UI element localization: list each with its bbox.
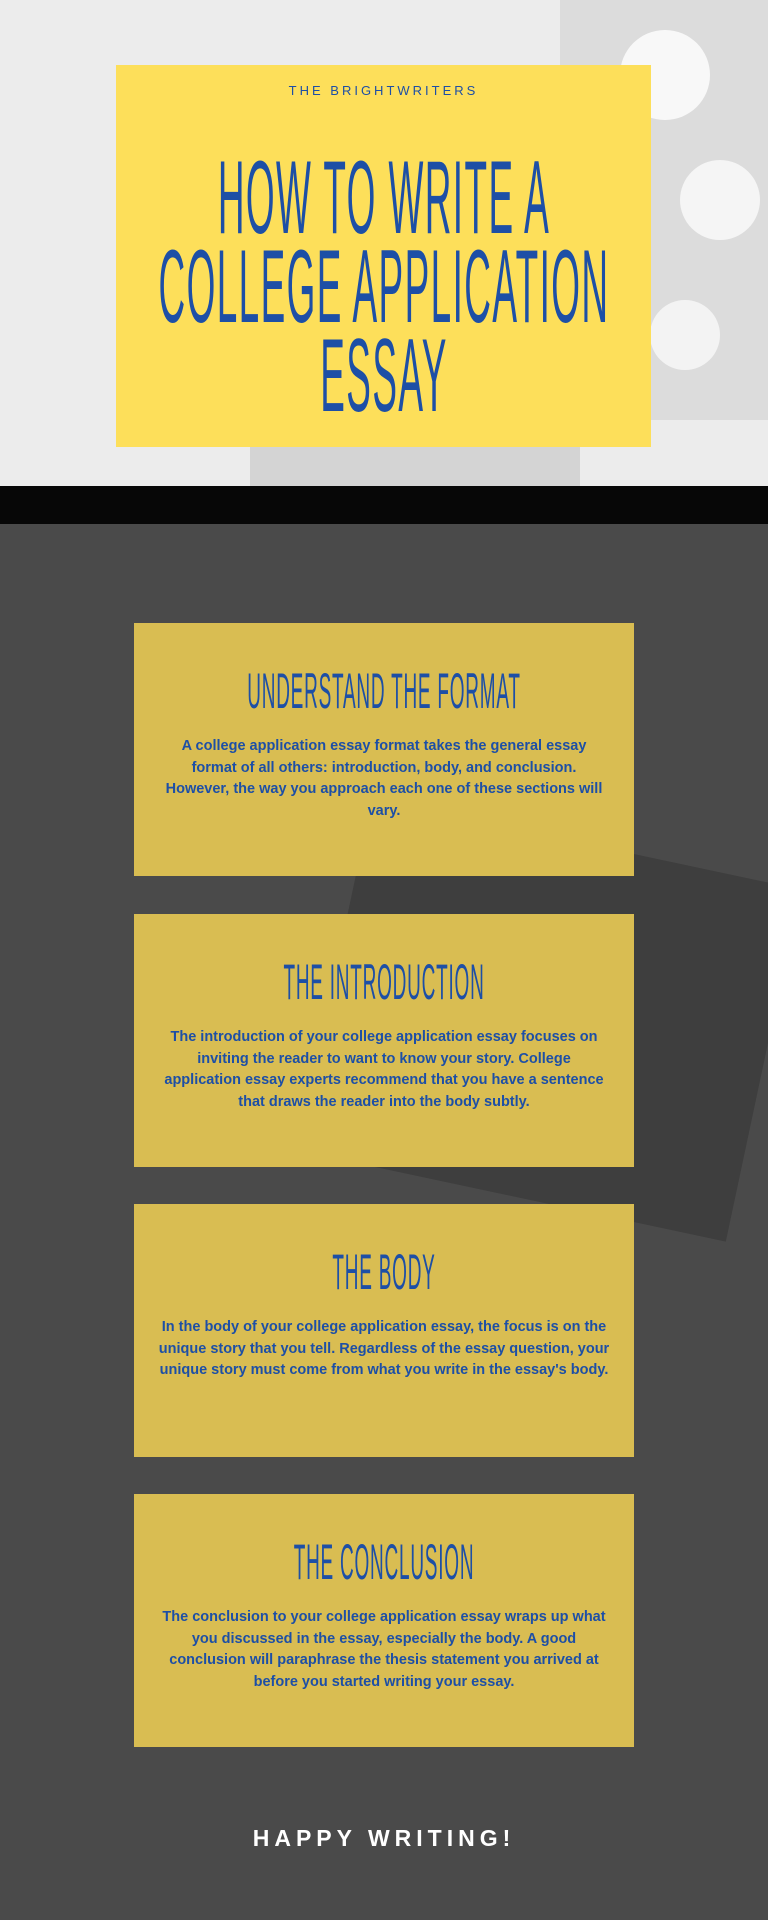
footer text: HAPPY WRITING! [253, 1825, 515, 1851]
title [158, 140, 609, 434]
panel: the conclusion: THE CONCLUSION [294, 1534, 474, 1590]
title: ESSAY [320, 318, 447, 434]
brand name: THE BRIGHTWRITERS [289, 83, 478, 98]
panel: the body [134, 1204, 634, 1457]
panel: understand the format: UNDERSTAND THE FORMAT [247, 663, 521, 719]
panel: the body: THE BODY [332, 1244, 436, 1300]
panel: the conclusion [134, 1494, 634, 1747]
title: COLLEGE APPLICATION [158, 229, 609, 345]
black band [0, 486, 768, 524]
header background [0, 0, 768, 486]
panel: the introduction: The introduction of your college application essay focuses on inviting the reader to want to know your story. College application essay experts recommend that you have a sentence that draws the reader into the body subtly. [164, 1029, 604, 1110]
title: HOW TO WRITE A [217, 140, 550, 256]
panel: the introduction: THE INTRODUCTION [283, 954, 485, 1010]
panel: the conclusion: The conclusion to your college application essay wraps up what you discussed in the essay, especially the body. A good conclusion will paraphrase the thesis statement you arrived at before you started writing your essay. [162, 1609, 606, 1690]
title box [116, 65, 651, 447]
keyboard background [297, 798, 768, 1242]
panel: understand the format: A college application essay format takes the general essay format of all others: introduction, body, and conclusion. However, the way you approach each one of these sections will vary. [166, 738, 602, 818]
panel: the introduction [134, 914, 634, 1167]
panel: the body: In the body of your college application essay, the focus is on the unique story that you tell. Regardless of the essay question, your unique story must come from what you write in the essay's body. [159, 1319, 609, 1378]
panel: understand the format [134, 623, 634, 876]
